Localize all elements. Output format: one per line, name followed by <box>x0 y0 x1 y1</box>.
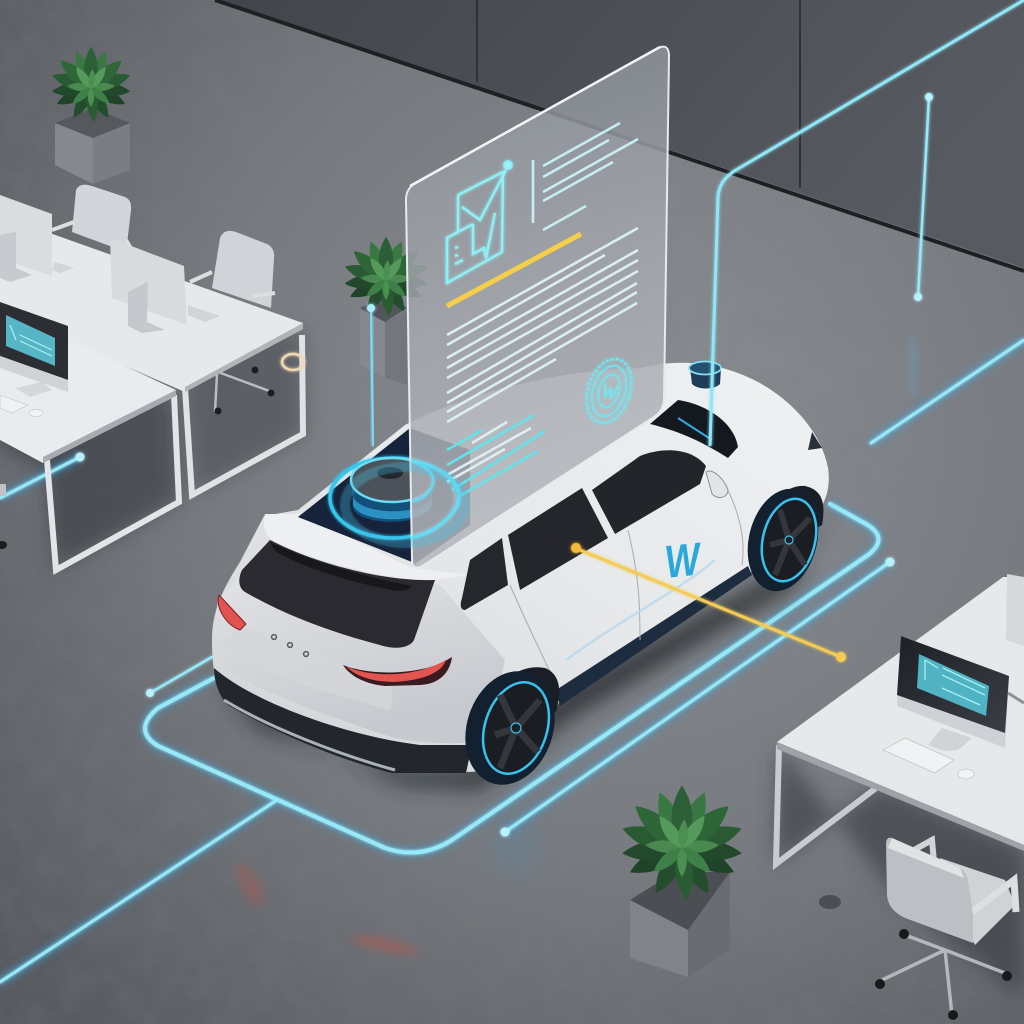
desks: left cluster <box>0 185 304 570</box>
glass sheet <box>406 47 669 568</box>
left desk frame <box>47 395 179 570</box>
floor glow reflections <box>229 331 917 959</box>
line end nodes <box>76 93 933 836</box>
monitor stand <box>928 728 972 751</box>
yellow heading bar <box>447 234 581 306</box>
mouse <box>958 769 974 779</box>
back desk frame <box>185 335 303 495</box>
desk legs <box>776 745 880 864</box>
side light streak <box>566 560 715 660</box>
side window middle <box>508 488 608 590</box>
lower bumper dark <box>214 668 472 773</box>
bumper skid strip <box>224 700 395 770</box>
route loop around car <box>145 504 879 852</box>
keyboard and mouse left <box>0 395 43 417</box>
side window rear quarter <box>461 538 508 610</box>
back desk top <box>0 226 303 392</box>
rear wheel <box>451 660 569 796</box>
header text lines <box>533 123 638 230</box>
plant: behind panel <box>343 237 429 385</box>
car <box>212 362 829 796</box>
roof sensor small <box>689 362 721 388</box>
front wheel arch <box>752 486 823 565</box>
monitor back far right <box>1006 574 1024 646</box>
rear hatch panel <box>215 540 505 743</box>
right desk group <box>776 574 1024 864</box>
body text lines <box>447 228 638 422</box>
lidar rings glow <box>330 458 456 538</box>
beam node <box>367 304 375 312</box>
rear badges <box>272 635 308 656</box>
front wheel <box>737 481 829 599</box>
amber ring <box>282 354 304 370</box>
left desk top <box>0 340 176 463</box>
rear window <box>239 540 435 648</box>
vertical beam to lidar <box>371 308 373 446</box>
right floor line <box>871 340 1024 443</box>
roof rear white <box>264 514 470 580</box>
door seams <box>510 490 743 672</box>
keyboard <box>883 738 954 773</box>
lidar ring over panel <box>345 461 465 543</box>
side window front <box>592 450 706 534</box>
monitor <box>897 636 1009 748</box>
car shadow <box>220 500 835 790</box>
side sill dark <box>556 566 752 706</box>
rear left guide line <box>150 657 212 693</box>
floor stain <box>819 895 841 909</box>
mirror <box>706 471 728 497</box>
certificate seal <box>579 353 639 429</box>
monitor front with teal screen <box>0 302 68 397</box>
glass roof front <box>650 400 738 458</box>
monitor back left <box>0 195 74 282</box>
glass roof rear <box>298 428 412 562</box>
pillar line upper right <box>918 97 929 297</box>
monitor back centre <box>110 238 220 333</box>
logo W: W <box>662 532 706 588</box>
left desk line <box>0 457 80 498</box>
lidar puck <box>351 458 433 522</box>
front right guide line <box>505 562 890 832</box>
lower left floor line <box>0 800 277 982</box>
body silhouette <box>212 363 829 772</box>
top edge highlight <box>410 47 660 186</box>
chair back left <box>52 185 132 252</box>
back wall panels <box>215 0 1024 271</box>
left tail light <box>218 595 246 630</box>
chair back right <box>190 231 275 414</box>
desk seam <box>1008 693 1024 703</box>
office chair lower right <box>875 838 1016 1020</box>
plant: top left <box>50 47 132 184</box>
plant bottom centre <box>619 785 745 977</box>
chair far left edge <box>0 484 7 549</box>
lower text lines <box>447 415 545 497</box>
yellow connector line <box>571 543 846 662</box>
right tail light <box>343 657 452 686</box>
connector from upper right to roof sensor <box>710 0 1024 446</box>
desk top <box>777 577 1024 845</box>
rear wheel arch <box>474 667 559 735</box>
envelope icon <box>447 161 512 283</box>
tailgate recess <box>224 625 392 710</box>
headlight sliver <box>808 432 822 450</box>
holographic document panel <box>406 47 669 568</box>
floor shadows under furniture <box>0 330 1024 1000</box>
floor line blue halo <box>0 340 1024 982</box>
